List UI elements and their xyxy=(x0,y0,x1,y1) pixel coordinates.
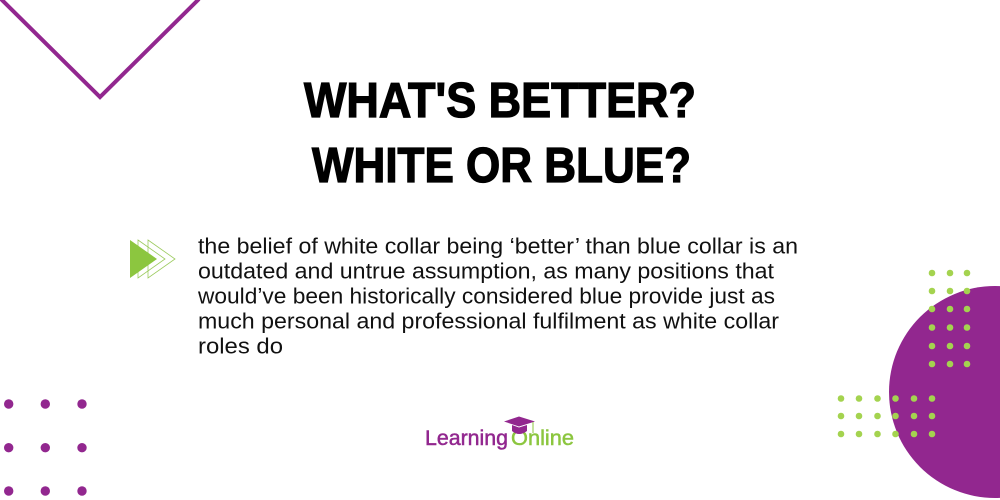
logo: Learning Online: Learning xyxy=(425,426,508,450)
green dot grid lower right xyxy=(838,395,935,437)
title xyxy=(304,73,696,193)
body text: much personal and professional fulfilment as white collar xyxy=(198,309,780,334)
body text: roles do xyxy=(198,334,283,359)
logo: Learning Online xyxy=(425,416,574,450)
icon: triple arrow xyxy=(130,240,175,278)
body text: outdated and untrue assumption, as many positions that xyxy=(198,259,775,284)
purple circle xyxy=(889,286,1000,498)
body text: the belief of white collar being ‘better’ than blue collar is an xyxy=(198,234,798,258)
purple dot grid lower left xyxy=(4,399,87,496)
title: WHITE OR BLUE? xyxy=(312,138,691,193)
body text xyxy=(197,234,798,359)
icon: graduation cap xyxy=(504,416,535,434)
title: WHAT'S BETTER? xyxy=(304,73,696,128)
chevron decoration top left xyxy=(1,0,199,97)
green dot grid upper right xyxy=(929,270,970,367)
body text: would’ve been historically considered blue provide just as xyxy=(197,284,775,309)
logo: Learning Online: Online xyxy=(511,426,574,450)
